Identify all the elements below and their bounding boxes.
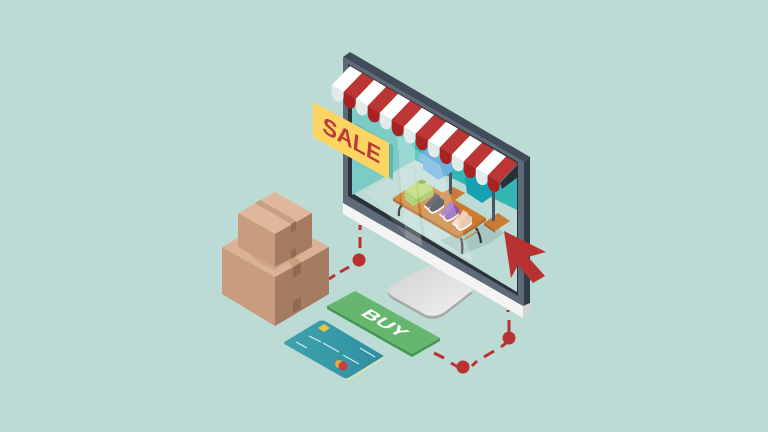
awning — [332, 66, 518, 192]
light beams — [397, 135, 473, 262]
buy label: BUY — [356, 307, 414, 340]
light pool on floor — [365, 172, 405, 236]
awning underside — [500, 164, 518, 189]
purple shoes — [439, 201, 459, 222]
credit card — [284, 320, 386, 380]
sale sign — [313, 102, 389, 179]
clothes stand front — [484, 192, 510, 233]
cardboard boxes — [222, 192, 329, 326]
screen floor — [352, 68, 517, 292]
white stripes — [332, 66, 506, 176]
right wall — [415, 104, 517, 210]
monitor frame — [343, 57, 524, 308]
store interior — [355, 123, 510, 262]
red stripes — [344, 73, 518, 182]
lower box — [222, 217, 329, 326]
table top — [393, 180, 486, 236]
white scallops — [332, 85, 488, 185]
card lines — [296, 336, 375, 364]
monitor top edge — [343, 52, 530, 162]
sign shadow on wall — [355, 123, 393, 180]
monitor — [343, 52, 530, 318]
teal shirt — [465, 168, 498, 203]
monitor stand base — [388, 266, 473, 319]
table legs — [399, 205, 481, 254]
monitor chin — [343, 203, 523, 318]
card logo — [335, 360, 348, 370]
dark shoes — [424, 193, 444, 214]
connector path: monitor to boxes — [329, 225, 366, 279]
screen bezel — [348, 64, 518, 296]
cursor arrow — [504, 231, 546, 283]
beige shoes — [452, 210, 472, 231]
monitor right side — [524, 157, 530, 308]
blue shirt — [419, 146, 455, 180]
green sweaters — [405, 179, 433, 206]
box contact shadow — [245, 241, 318, 270]
card chip — [318, 324, 330, 332]
buy button — [327, 291, 440, 357]
floor shadow — [440, 222, 504, 255]
red scallops — [344, 92, 500, 192]
upper box — [238, 192, 312, 267]
sale text: SALE — [321, 113, 382, 170]
left wall — [352, 68, 415, 195]
clothes stand back — [442, 168, 465, 202]
connector path: monitor to buy button — [434, 310, 516, 374]
